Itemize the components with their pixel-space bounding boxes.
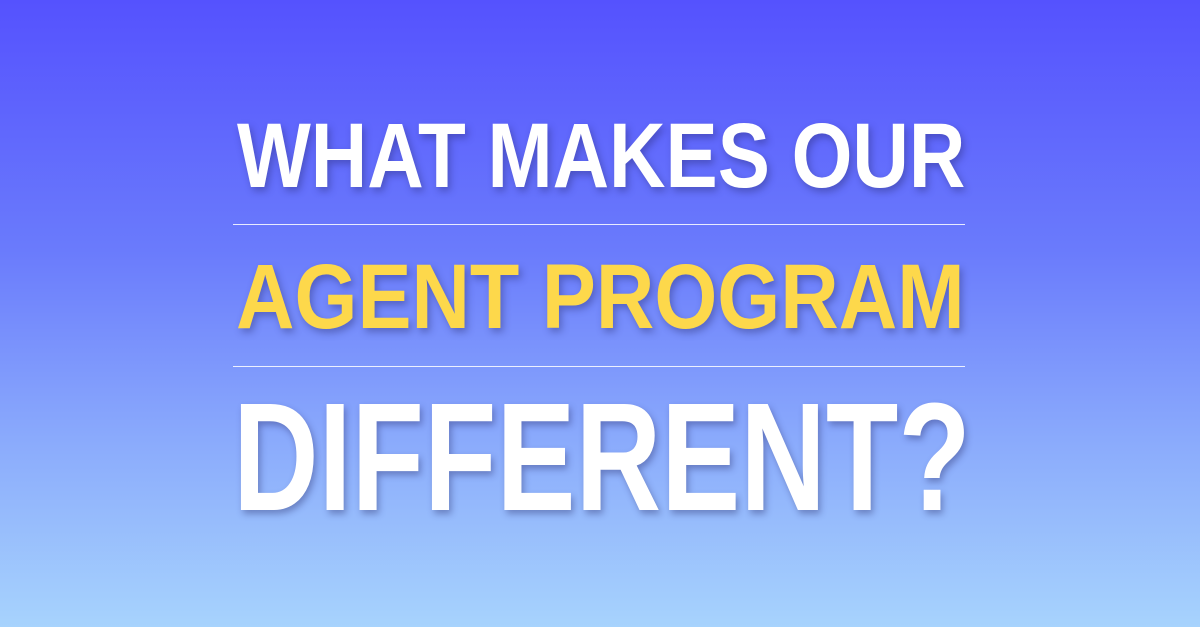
title line 3: DIFFERENT?	[233, 371, 971, 543]
title line 2 (highlight): AGENT PROGRAM	[236, 246, 965, 348]
title line 1: WHAT MAKES OUR	[237, 105, 965, 207]
